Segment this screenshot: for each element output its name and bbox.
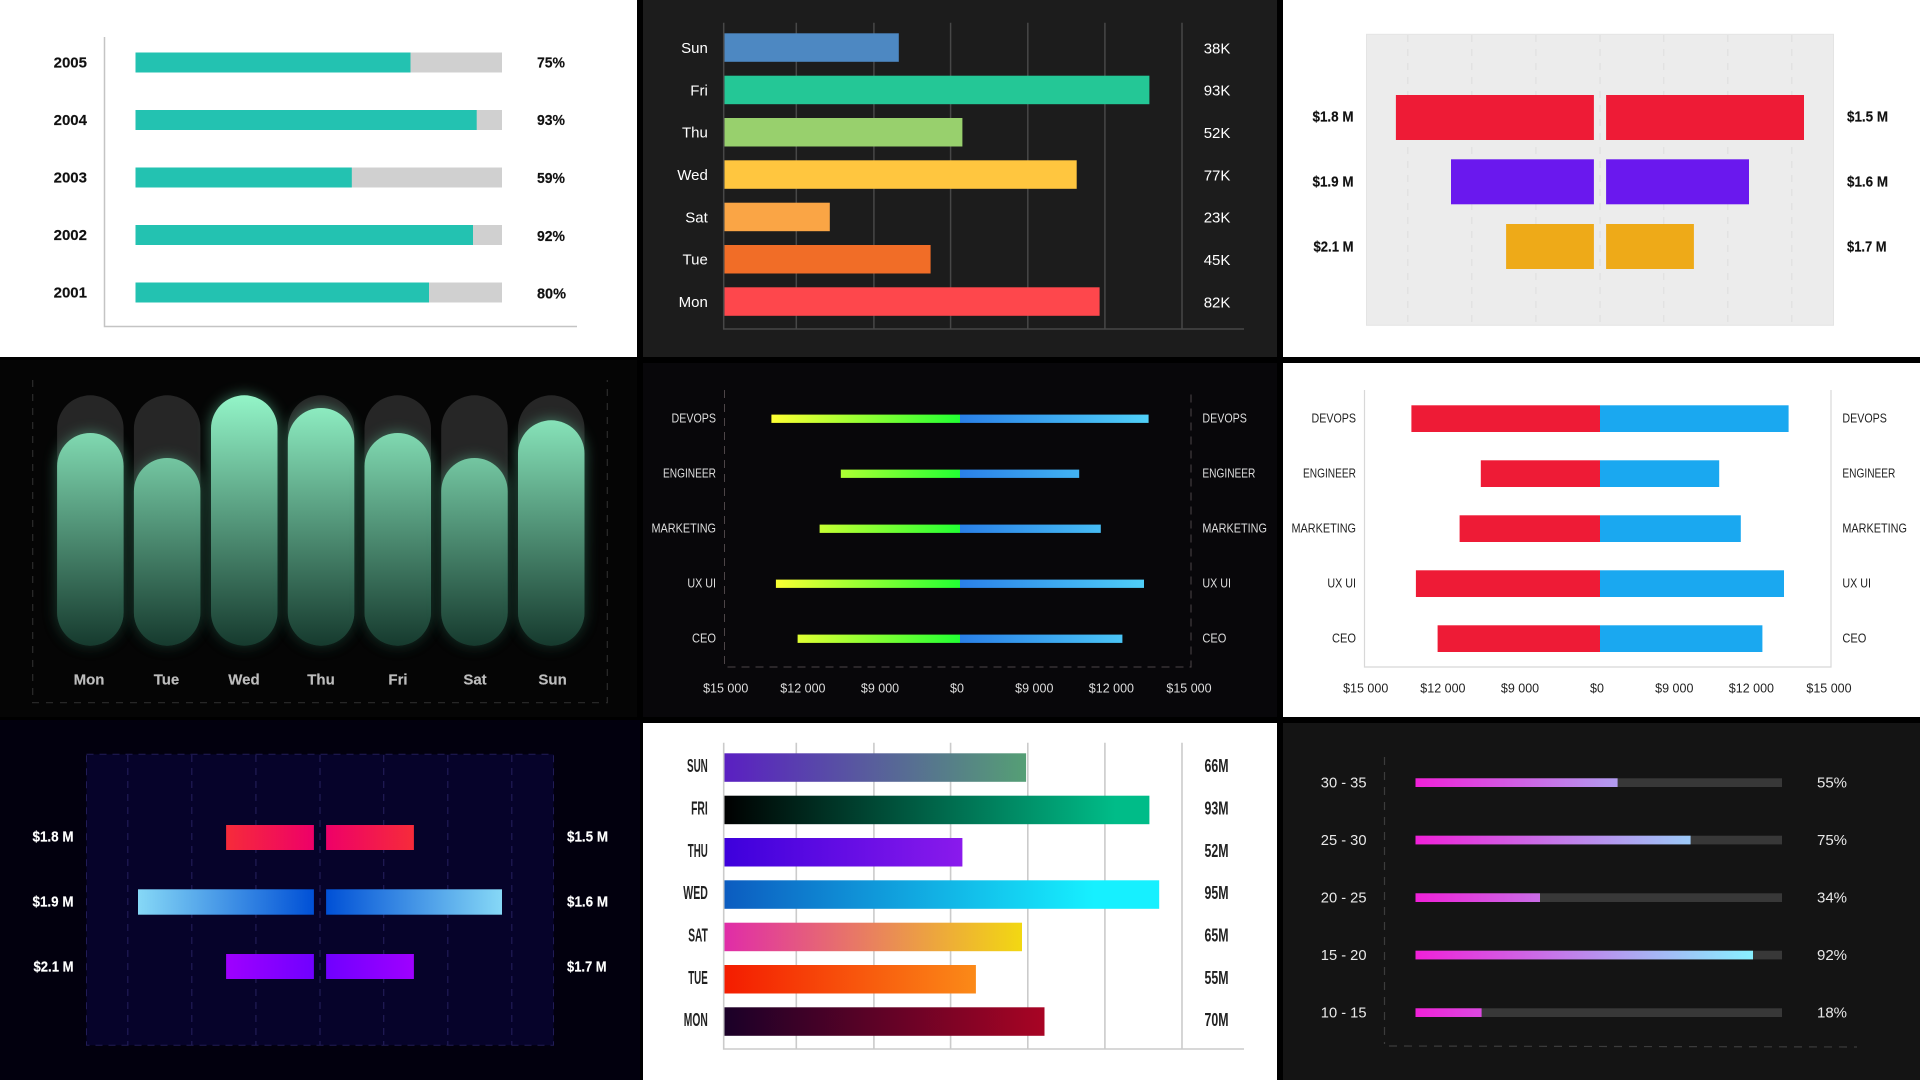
row: FRI: FRI bbox=[691, 798, 708, 818]
row: SUN: SUN bbox=[687, 756, 708, 776]
row: 2005: 75% bbox=[537, 55, 565, 72]
row: 20-25 bbox=[1321, 889, 1847, 906]
column: Tue: Tue bbox=[154, 671, 179, 688]
row: 2002: 92% bbox=[537, 228, 565, 245]
row: DEVOPS: DEVOPS bbox=[1202, 411, 1247, 425]
row: 2004 bbox=[54, 110, 565, 130]
row: Tue: 45K bbox=[1204, 252, 1230, 269]
row: WED: WED bbox=[683, 883, 708, 903]
row: red bbox=[32, 825, 608, 850]
column: Fri bbox=[364, 395, 431, 688]
row: UX UI: UX UI bbox=[1327, 576, 1356, 590]
row: ENGINEER bbox=[663, 466, 1255, 480]
row: purple: $1.6 M bbox=[1847, 174, 1888, 191]
row: TUE: 55M bbox=[1204, 968, 1228, 988]
row: 20-25: 20 - 25 bbox=[1321, 889, 1366, 906]
axis labels: $12 000 bbox=[1729, 681, 1774, 695]
row: 15-20: 15 - 20 bbox=[1321, 947, 1366, 964]
panel: yearly progress bars bbox=[0, 0, 637, 357]
axis labels: $12 000 bbox=[780, 681, 826, 695]
column: Sun bbox=[518, 395, 584, 688]
row: orange: $2.1 M bbox=[1314, 239, 1354, 256]
axis labels: $9 000 bbox=[1501, 681, 1539, 695]
row: 30-35 bbox=[1321, 774, 1847, 791]
row: UX UI: UX UI bbox=[1202, 576, 1231, 590]
column: Sat: Sat bbox=[463, 671, 487, 688]
row: TUE: TUE bbox=[688, 968, 708, 988]
row: MARKETING: MARKETING bbox=[1842, 521, 1907, 535]
axis labels: $9 000 bbox=[1655, 681, 1693, 695]
row: 10-15: 10 - 15 bbox=[1321, 1004, 1366, 1021]
panel: weekday bar chart dark bbox=[643, 0, 1277, 357]
row: UX UI: UX UI bbox=[1842, 576, 1871, 590]
column: Mon bbox=[57, 395, 124, 688]
row: 10-15: 18% bbox=[1817, 1004, 1847, 1021]
row: Sun bbox=[681, 33, 1230, 62]
row: orange bbox=[1314, 224, 1887, 269]
row: Sun: Sun bbox=[681, 40, 708, 57]
row: SUN: 66M bbox=[1204, 756, 1228, 776]
row: 2005: 2005 bbox=[54, 55, 87, 72]
row: 2002 bbox=[54, 225, 565, 245]
row: UX UI: UX UI bbox=[687, 576, 716, 590]
axis labels: $12 000 bbox=[1089, 681, 1134, 695]
axis labels: $15 000 bbox=[1166, 681, 1212, 695]
row: MARKETING: MARKETING bbox=[652, 521, 716, 535]
axis labels: $9 000 bbox=[861, 681, 899, 695]
row: ENGINEER: ENGINEER bbox=[1303, 466, 1356, 480]
row: 2003: 59% bbox=[537, 170, 565, 187]
row: CEO: CEO bbox=[692, 631, 716, 645]
row: 10-15 bbox=[1321, 1004, 1847, 1021]
row: ENGINEER: ENGINEER bbox=[1202, 466, 1255, 480]
row: purple: $1.7 M bbox=[567, 959, 607, 976]
row: red: $1.8 M bbox=[32, 829, 74, 846]
row: orange: $1.7 M bbox=[1847, 239, 1887, 256]
row: Sat: 23K bbox=[1204, 210, 1230, 227]
column: Tue bbox=[134, 395, 200, 688]
column: Mon: Mon bbox=[74, 671, 104, 688]
row: UX UI bbox=[687, 576, 1231, 590]
row: DEVOPS: DEVOPS bbox=[1842, 411, 1887, 425]
row: DEVOPS bbox=[1312, 405, 1887, 432]
row: Wed bbox=[677, 160, 1230, 189]
column: Wed: Wed bbox=[228, 671, 260, 688]
axis labels: $15 000 bbox=[1806, 681, 1852, 695]
axis labels: $0 bbox=[950, 681, 964, 695]
row: CEO bbox=[692, 631, 1227, 645]
row: 2004: 93% bbox=[537, 112, 565, 129]
row: blue: $1.9 M bbox=[32, 894, 74, 911]
column: Sat bbox=[441, 395, 508, 688]
row: 2003: 2003 bbox=[54, 170, 87, 187]
axis labels: $9 000 bbox=[1015, 681, 1053, 695]
panel: mirrored funnel bars light bbox=[1283, 0, 1920, 357]
axis labels bbox=[703, 681, 1212, 695]
row: THU: THU bbox=[688, 841, 708, 861]
row: WED: 95M bbox=[1204, 883, 1228, 903]
row: 25-30: 75% bbox=[1817, 832, 1847, 849]
row: 15-20: 92% bbox=[1817, 947, 1847, 964]
row: Thu: Thu bbox=[682, 125, 708, 142]
row: SAT: 65M bbox=[1204, 926, 1228, 946]
row: 2001: 2001 bbox=[54, 285, 87, 302]
row: MARKETING: MARKETING bbox=[1292, 521, 1356, 535]
row: 2003 bbox=[54, 168, 565, 188]
row: MON: MON bbox=[684, 1010, 708, 1030]
row: 30-35: 55% bbox=[1817, 774, 1847, 791]
row: 15-20 bbox=[1321, 947, 1847, 964]
row: Mon: 82K bbox=[1204, 294, 1230, 311]
row: blue bbox=[32, 889, 608, 915]
axis labels: $15 000 bbox=[1343, 681, 1388, 695]
panel: age range progress bars dark bbox=[1283, 723, 1920, 1080]
row: 2001 bbox=[54, 282, 566, 303]
row: Mon: Mon bbox=[679, 294, 708, 311]
column: Thu: Thu bbox=[307, 671, 335, 688]
row: Wed: 77K bbox=[1204, 167, 1230, 184]
row: MARKETING bbox=[1292, 515, 1907, 542]
axis labels: $0 bbox=[1590, 681, 1604, 695]
row: red bbox=[1312, 95, 1888, 140]
row: ENGINEER bbox=[1303, 460, 1895, 487]
row: FRI: 93M bbox=[1204, 798, 1228, 818]
row: SAT bbox=[688, 923, 1228, 951]
row: Mon bbox=[679, 287, 1230, 316]
row: 2004: 2004 bbox=[54, 112, 88, 129]
row: Sun: 38K bbox=[1204, 40, 1230, 57]
row: Tue: Tue bbox=[683, 252, 708, 269]
row: Fri bbox=[690, 76, 1230, 104]
row: Thu bbox=[682, 118, 1230, 146]
row: 20-25: 34% bbox=[1817, 889, 1847, 906]
row: CEO: CEO bbox=[1202, 631, 1227, 645]
column: Thu bbox=[288, 395, 354, 688]
row: MARKETING bbox=[652, 521, 1267, 535]
row: DEVOPS: DEVOPS bbox=[1312, 411, 1356, 425]
panel: diverging gradient salary bars dark bbox=[643, 363, 1277, 717]
row: red: $1.5 M bbox=[567, 829, 608, 846]
row: THU: 52M bbox=[1204, 841, 1228, 861]
panel: diverging salary bars light bbox=[1283, 363, 1920, 717]
row: Sat bbox=[685, 203, 1230, 231]
row: DEVOPS bbox=[672, 411, 1247, 425]
row: blue: $1.6 M bbox=[567, 894, 608, 911]
row: ENGINEER: ENGINEER bbox=[1842, 466, 1895, 480]
row: Fri: Fri bbox=[690, 82, 708, 99]
row: DEVOPS: DEVOPS bbox=[672, 411, 716, 425]
row: purple: $1.9 M bbox=[1312, 174, 1354, 191]
column: Fri: Fri bbox=[388, 671, 408, 688]
row: SAT: SAT bbox=[688, 926, 708, 946]
row: purple: $2.1 M bbox=[34, 959, 74, 976]
panel: glowing pill columns bbox=[0, 360, 637, 717]
row: ENGINEER: ENGINEER bbox=[663, 466, 716, 480]
row: 25-30: 25 - 30 bbox=[1321, 832, 1366, 849]
column: Sun: Sun bbox=[538, 671, 567, 688]
row: MON: 70M bbox=[1204, 1010, 1228, 1030]
row: Fri: 93K bbox=[1204, 83, 1230, 100]
row: UX UI bbox=[1327, 570, 1871, 597]
row: purple bbox=[1312, 159, 1888, 204]
row: FRI bbox=[691, 796, 1228, 824]
panel: mirrored gradient bars navy bbox=[0, 720, 640, 1080]
row: Sat: Sat bbox=[685, 209, 709, 226]
row: 30-35: 30 - 35 bbox=[1321, 774, 1366, 791]
row: SUN bbox=[687, 753, 1228, 782]
row: Tue bbox=[683, 245, 1230, 274]
axis labels: $12 000 bbox=[1420, 681, 1466, 695]
row: Thu: 52K bbox=[1204, 125, 1230, 142]
row: 2005 bbox=[54, 52, 565, 72]
row: WED bbox=[683, 880, 1228, 909]
row: purple bbox=[34, 954, 607, 979]
row: red: $1.8 M bbox=[1312, 109, 1354, 126]
axis labels bbox=[1343, 681, 1852, 695]
column: Wed bbox=[211, 395, 278, 688]
row: Wed: Wed bbox=[677, 167, 708, 184]
row: THU bbox=[688, 838, 1228, 866]
row: red: $1.5 M bbox=[1847, 109, 1888, 126]
row: 2002: 2002 bbox=[54, 227, 87, 244]
row: 2001: 80% bbox=[537, 286, 566, 303]
row: MARKETING: MARKETING bbox=[1202, 521, 1267, 535]
panel: weekday gradient bars light bbox=[643, 723, 1277, 1080]
row: TUE bbox=[688, 965, 1228, 994]
row: CEO: CEO bbox=[1332, 631, 1356, 645]
row: CEO bbox=[1332, 625, 1867, 652]
row: MON bbox=[684, 1007, 1228, 1036]
row: 25-30 bbox=[1321, 832, 1847, 849]
row: CEO: CEO bbox=[1842, 631, 1867, 645]
axis labels: $15 000 bbox=[703, 681, 748, 695]
